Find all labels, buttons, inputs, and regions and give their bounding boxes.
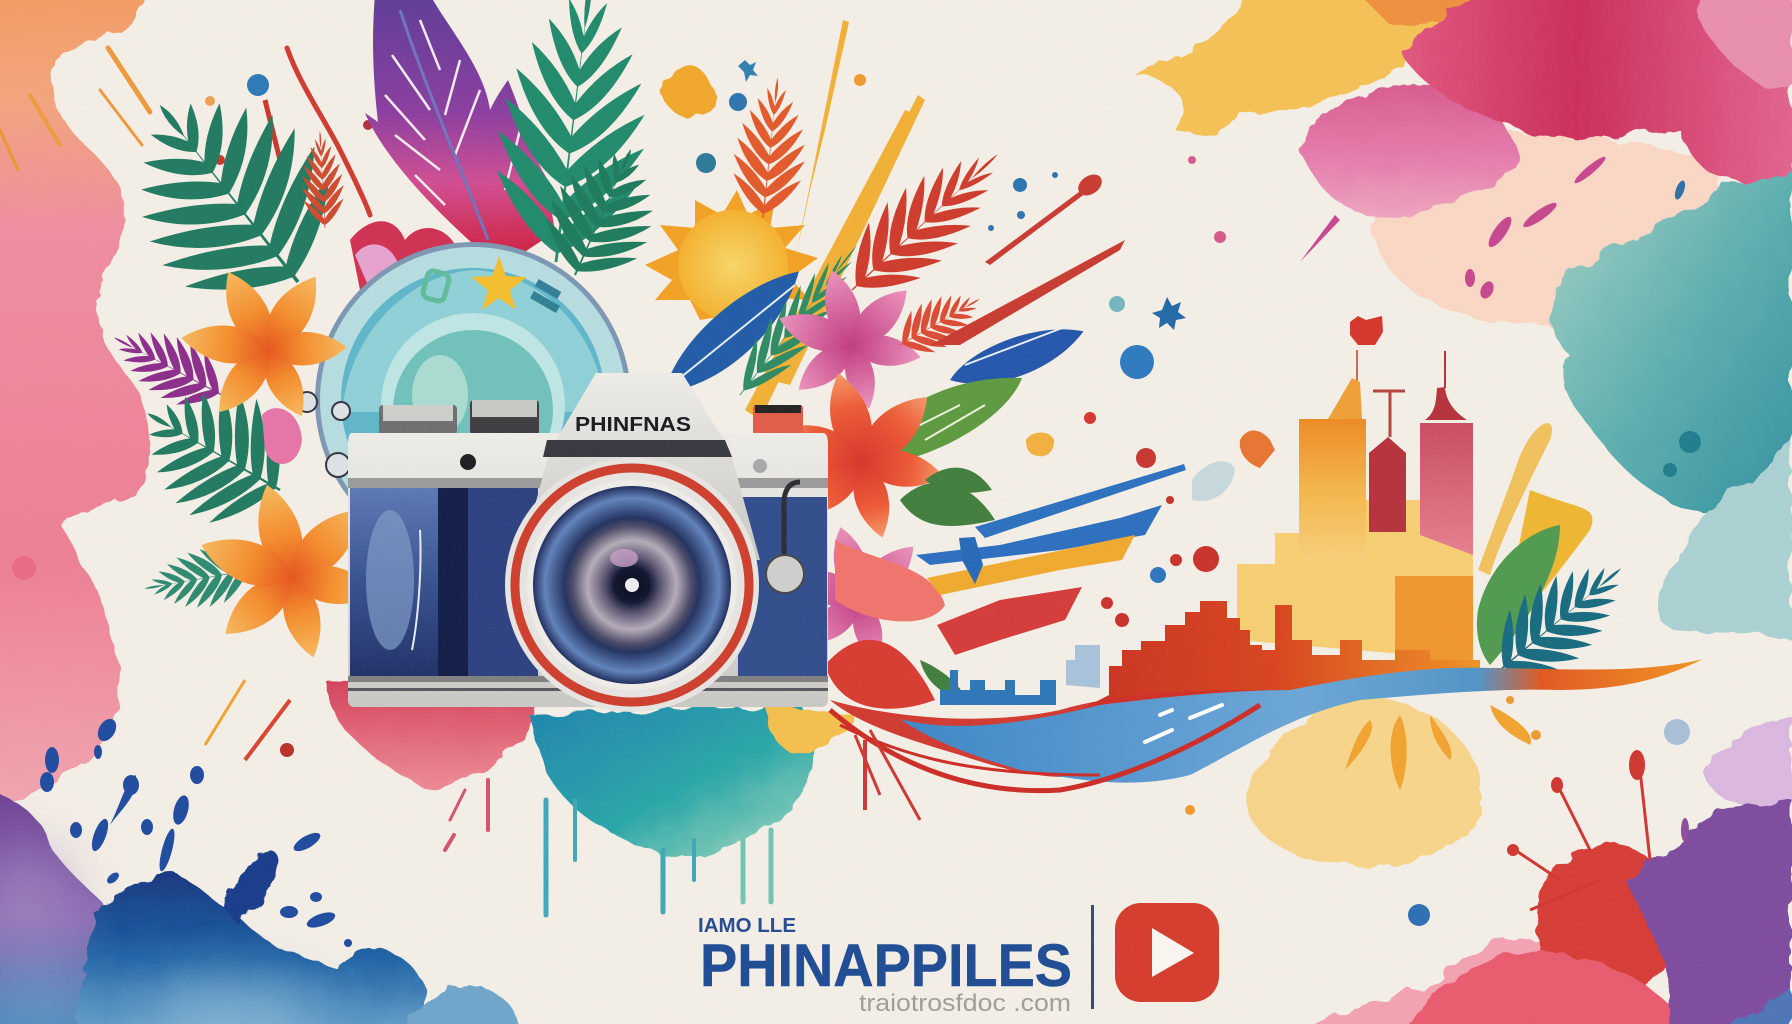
camera lens (505, 458, 759, 712)
frond: top green (483, 0, 664, 271)
orange blob splat (660, 67, 713, 119)
pink flower (774, 266, 923, 412)
feather: purple and magenta (350, 0, 555, 290)
frond: lower-left green (114, 355, 314, 548)
thin red streak: top left (287, 48, 370, 215)
play button icon (1115, 903, 1219, 1002)
skyline: red and orange silhouette (1080, 601, 1480, 725)
blue paint drops (40, 716, 352, 947)
green leaf: right (875, 378, 1022, 460)
green leaves right of camera (900, 468, 995, 700)
watercolor wash: crimson (1400, 0, 1792, 184)
frond: red-orange behind sun (727, 74, 813, 222)
orange rays under ribbon (1345, 705, 1531, 790)
skyline: pale blue tower (1066, 645, 1100, 688)
paint splat: under camera yellow (765, 705, 855, 752)
watercolor wash: left pink and orange (0, 0, 155, 810)
disk markings (422, 270, 561, 313)
skyline: crimson tower (1369, 437, 1406, 532)
blue star (1152, 297, 1186, 330)
vertical divider (1091, 905, 1094, 1009)
orange flower bottom (194, 479, 381, 662)
soft highlights in bottom-left wash (0, 850, 320, 1024)
url text: traiotrosfdoc .com (859, 990, 1071, 1017)
camera dials (379, 400, 803, 435)
red flower right of camera (769, 368, 947, 542)
watercolor wash: top-right yellow (1135, 0, 1460, 135)
skyline: orange tower (1299, 419, 1366, 560)
wordmark: PHINAPPILES (700, 932, 1072, 999)
skyline: orange block (1395, 576, 1473, 665)
small tagline: IAMO LLE (698, 915, 796, 937)
watercolor wash: teal (1549, 170, 1792, 640)
stripes left of skyline (916, 464, 1186, 655)
skyline: pink tower (1420, 423, 1473, 555)
paint drips: teal (546, 800, 771, 915)
red and green sprays below left flower (245, 700, 290, 760)
skyline: yellow castle (1237, 500, 1473, 660)
yellow streaks (745, 20, 925, 420)
sun (645, 190, 818, 320)
camera strap knob (766, 482, 804, 593)
paint splats: top-right magenta dashes (1300, 154, 1687, 301)
watercolor wash: peach (1370, 130, 1722, 326)
watercolor wash: bottom-left purple and blue (0, 790, 525, 1024)
teal and rust marks on the right wash (1679, 431, 1701, 453)
lens disk behind camera (315, 242, 631, 558)
skyline: blue (940, 670, 1056, 705)
star (471, 256, 527, 310)
frond: small red top-left (299, 130, 346, 229)
pink and red flower low right (784, 523, 945, 709)
pink dot on left wash (12, 556, 36, 580)
paint drips: bottom-right red (1408, 719, 1690, 926)
small top-left dots (205, 74, 373, 180)
paint drips: pink (445, 780, 488, 850)
frond: bottom-left small green (139, 541, 255, 618)
watercolor wash: bottom-right red and purple (1290, 715, 1792, 1024)
frond: left dark green (84, 46, 374, 341)
paint splat: under skyline yellow (1245, 695, 1482, 866)
frond: teal by skyline (1473, 536, 1648, 702)
bottom text lockup (698, 903, 1219, 1017)
camera brand text: PHINFNAS (575, 414, 691, 436)
frond: purple (99, 310, 237, 423)
paint splat: under camera pink (325, 680, 540, 787)
scattered paint dots (12, 60, 1701, 820)
skyline (940, 316, 1480, 725)
feather: blue right (944, 317, 1091, 397)
camera silver body (348, 433, 828, 707)
yellow splash at right of towers (1478, 423, 1552, 575)
leaf: green and yellow by skyline (1477, 490, 1592, 665)
watercolor wash: pink (1300, 84, 1516, 217)
frond: yellow-green (722, 232, 874, 409)
orange flower top (163, 246, 362, 443)
disk clips (297, 392, 350, 477)
camera prism (520, 373, 760, 560)
watercolor wash: top-right orange patch (1355, 0, 1480, 25)
camera blue panels (350, 488, 827, 680)
frond: red accents over pink flower (887, 277, 992, 367)
paint splat: under camera teal (530, 705, 813, 915)
camera (348, 373, 828, 712)
frond: lower right of top green (527, 128, 679, 296)
bottom orange dots (1185, 805, 1195, 815)
pink buds under top flower (262, 408, 302, 464)
orange streaks: top left (0, 48, 150, 170)
frond: red fern (825, 125, 1025, 319)
feather: blue left (649, 257, 817, 409)
ribbon (830, 659, 1703, 791)
skyline: tower top ornaments (1328, 316, 1467, 437)
red streaks: right (930, 170, 1125, 345)
